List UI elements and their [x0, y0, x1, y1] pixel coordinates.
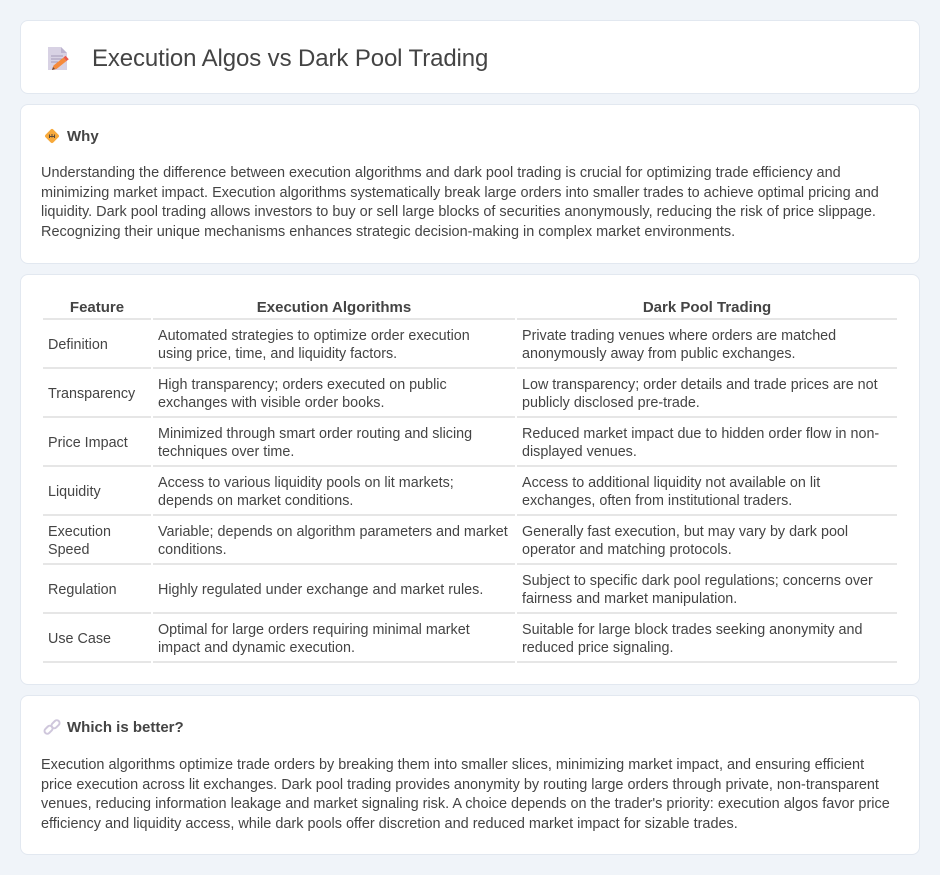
use case: execution algorithms — [158, 622, 470, 656]
price impact: execution algorithms: Minimized through smart order routing and slicing — [158, 426, 472, 442]
text: which is better paragraph: price execution across lit exchanges. Dark pool trading provides anonymity by routing large orders through private, non-transparent — [41, 777, 879, 793]
row: definition: Definition — [48, 337, 108, 353]
row: execution speed: Speed — [48, 542, 89, 558]
execution speed: dark pool trading: Generally fast execution, but may vary by dark pool — [522, 524, 848, 540]
row: execution speed: Execution — [48, 524, 111, 540]
use case: dark pool trading: reduced price signaling. — [522, 640, 674, 656]
panel: why — [20, 104, 920, 264]
transparency: execution algorithms — [158, 377, 447, 411]
icon: diamond sign — [45, 128, 59, 144]
panel: which is better — [20, 695, 920, 855]
table header: feature — [43, 298, 151, 320]
liquidity: execution algorithms — [158, 475, 454, 509]
text: which is better paragraph — [41, 757, 890, 832]
text: why paragraph: liquidity. Dark pool trading allows investors to buy or sell large blocks of securities anonymously, reducing the risk of price slippage. — [41, 204, 876, 220]
panel: comparison table — [20, 274, 920, 685]
use case: execution algorithms: impact and dynamic execution. — [158, 640, 355, 656]
execution speed: dark pool trading — [522, 524, 848, 558]
definition: execution algorithms: using price, time, and liquidity factors. — [158, 346, 397, 362]
execution speed: execution algorithms: Variable; depends on algorithm parameters and market — [158, 524, 508, 540]
definition: dark pool trading — [522, 328, 836, 362]
regulation: dark pool trading — [522, 573, 873, 607]
table header: feature: Feature — [70, 299, 124, 316]
transparency: execution algorithms: exchanges with visible order books. — [158, 395, 384, 411]
text: why paragraph: minimizing market impact. Execution algorithms systematically break large orders into smaller trades to achieve optimal pricing and — [41, 185, 879, 201]
price impact: dark pool trading: Reduced market impact due to hidden order flow in non- — [522, 426, 879, 442]
text: which is better paragraph: venues, reducing information leakage and market signaling risk. A choice depends on the trader's priority: execution algos favor price — [41, 796, 890, 812]
row: execution speed — [48, 524, 111, 558]
text: why paragraph: Recognizing their unique mechanisms enhances strategic decision-making in complex market environments. — [41, 224, 735, 240]
row: regulation: Regulation — [48, 582, 117, 598]
regulation: execution algorithms: Highly regulated under exchange and market rules. — [158, 582, 483, 598]
table header: execution algorithms: Execution Algorithms — [257, 299, 411, 316]
text: why paragraph: Understanding the difference between execution algorithms and dark pool trading is crucial for optimizing trade efficiency and — [41, 165, 841, 181]
use case: execution algorithms: Optimal for large orders requiring minimal market — [158, 622, 470, 638]
title: Execution Algos vs Dark Pool Trading — [92, 45, 488, 72]
price impact: execution algorithms — [158, 426, 472, 460]
execution speed: execution algorithms: conditions. — [158, 542, 227, 558]
heading: which is better: Which is better? — [67, 719, 184, 736]
execution speed: dark pool trading: operator and matching protocols. — [522, 542, 732, 558]
row: liquidity: Liquidity — [48, 484, 101, 500]
transparency: dark pool trading — [522, 377, 878, 411]
heading: why: Why — [67, 128, 99, 145]
transparency: execution algorithms: High transparency; orders executed on public — [158, 377, 447, 393]
row: use case: Use Case — [48, 631, 111, 647]
table header: execution algorithms — [153, 298, 515, 320]
transparency: dark pool trading: Low transparency; order details and trade prices are not — [522, 377, 878, 393]
icon: link — [44, 719, 60, 735]
row: price impact: Price Impact — [48, 435, 128, 451]
regulation: dark pool trading: fairness and market manipulation. — [522, 591, 737, 607]
price impact: dark pool trading — [522, 426, 879, 460]
definition: execution algorithms: Automated strategies to optimize order execution — [158, 328, 470, 344]
liquidity: execution algorithms: Access to various liquidity pools on lit markets; — [158, 475, 454, 491]
panel: title card — [20, 20, 920, 94]
icon: memo with pencil — [48, 47, 69, 70]
text: which is better paragraph: Execution algorithms optimize trade orders by breaking them into smaller slices, minimizing market impact, and ensuring efficient — [41, 757, 864, 773]
definition: execution algorithms — [158, 328, 470, 362]
text: which is better paragraph: efficiency and liquidity access, while dark pools offer discretion and reduced market impact for sizable trades. — [41, 816, 738, 832]
execution speed: execution algorithms — [158, 524, 508, 558]
use case: dark pool trading: Suitable for large block trades seeking anonymity and — [522, 622, 862, 638]
definition: dark pool trading: anonymously away from public exchanges. — [522, 346, 795, 362]
liquidity: dark pool trading: exchanges, often from institutional traders. — [522, 493, 792, 509]
liquidity: execution algorithms: depends on market conditions. — [158, 493, 353, 509]
text: why paragraph — [41, 165, 879, 240]
table header: dark pool trading — [517, 298, 897, 320]
definition: dark pool trading: Private trading venues where orders are matched — [522, 328, 836, 344]
liquidity: dark pool trading — [522, 475, 820, 509]
price impact: execution algorithms: techniques over time. — [158, 444, 294, 460]
regulation: dark pool trading: Subject to specific dark pool regulations; concerns over — [522, 573, 873, 589]
transparency: dark pool trading: publicly disclosed pre-trade. — [522, 395, 700, 411]
row: transparency: Transparency — [48, 386, 135, 402]
table header: dark pool trading: Dark Pool Trading — [643, 299, 771, 316]
liquidity: dark pool trading: Access to additional liquidity not available on lit — [522, 475, 820, 491]
use case: dark pool trading — [522, 622, 862, 656]
price impact: dark pool trading: displayed venues. — [522, 444, 637, 460]
